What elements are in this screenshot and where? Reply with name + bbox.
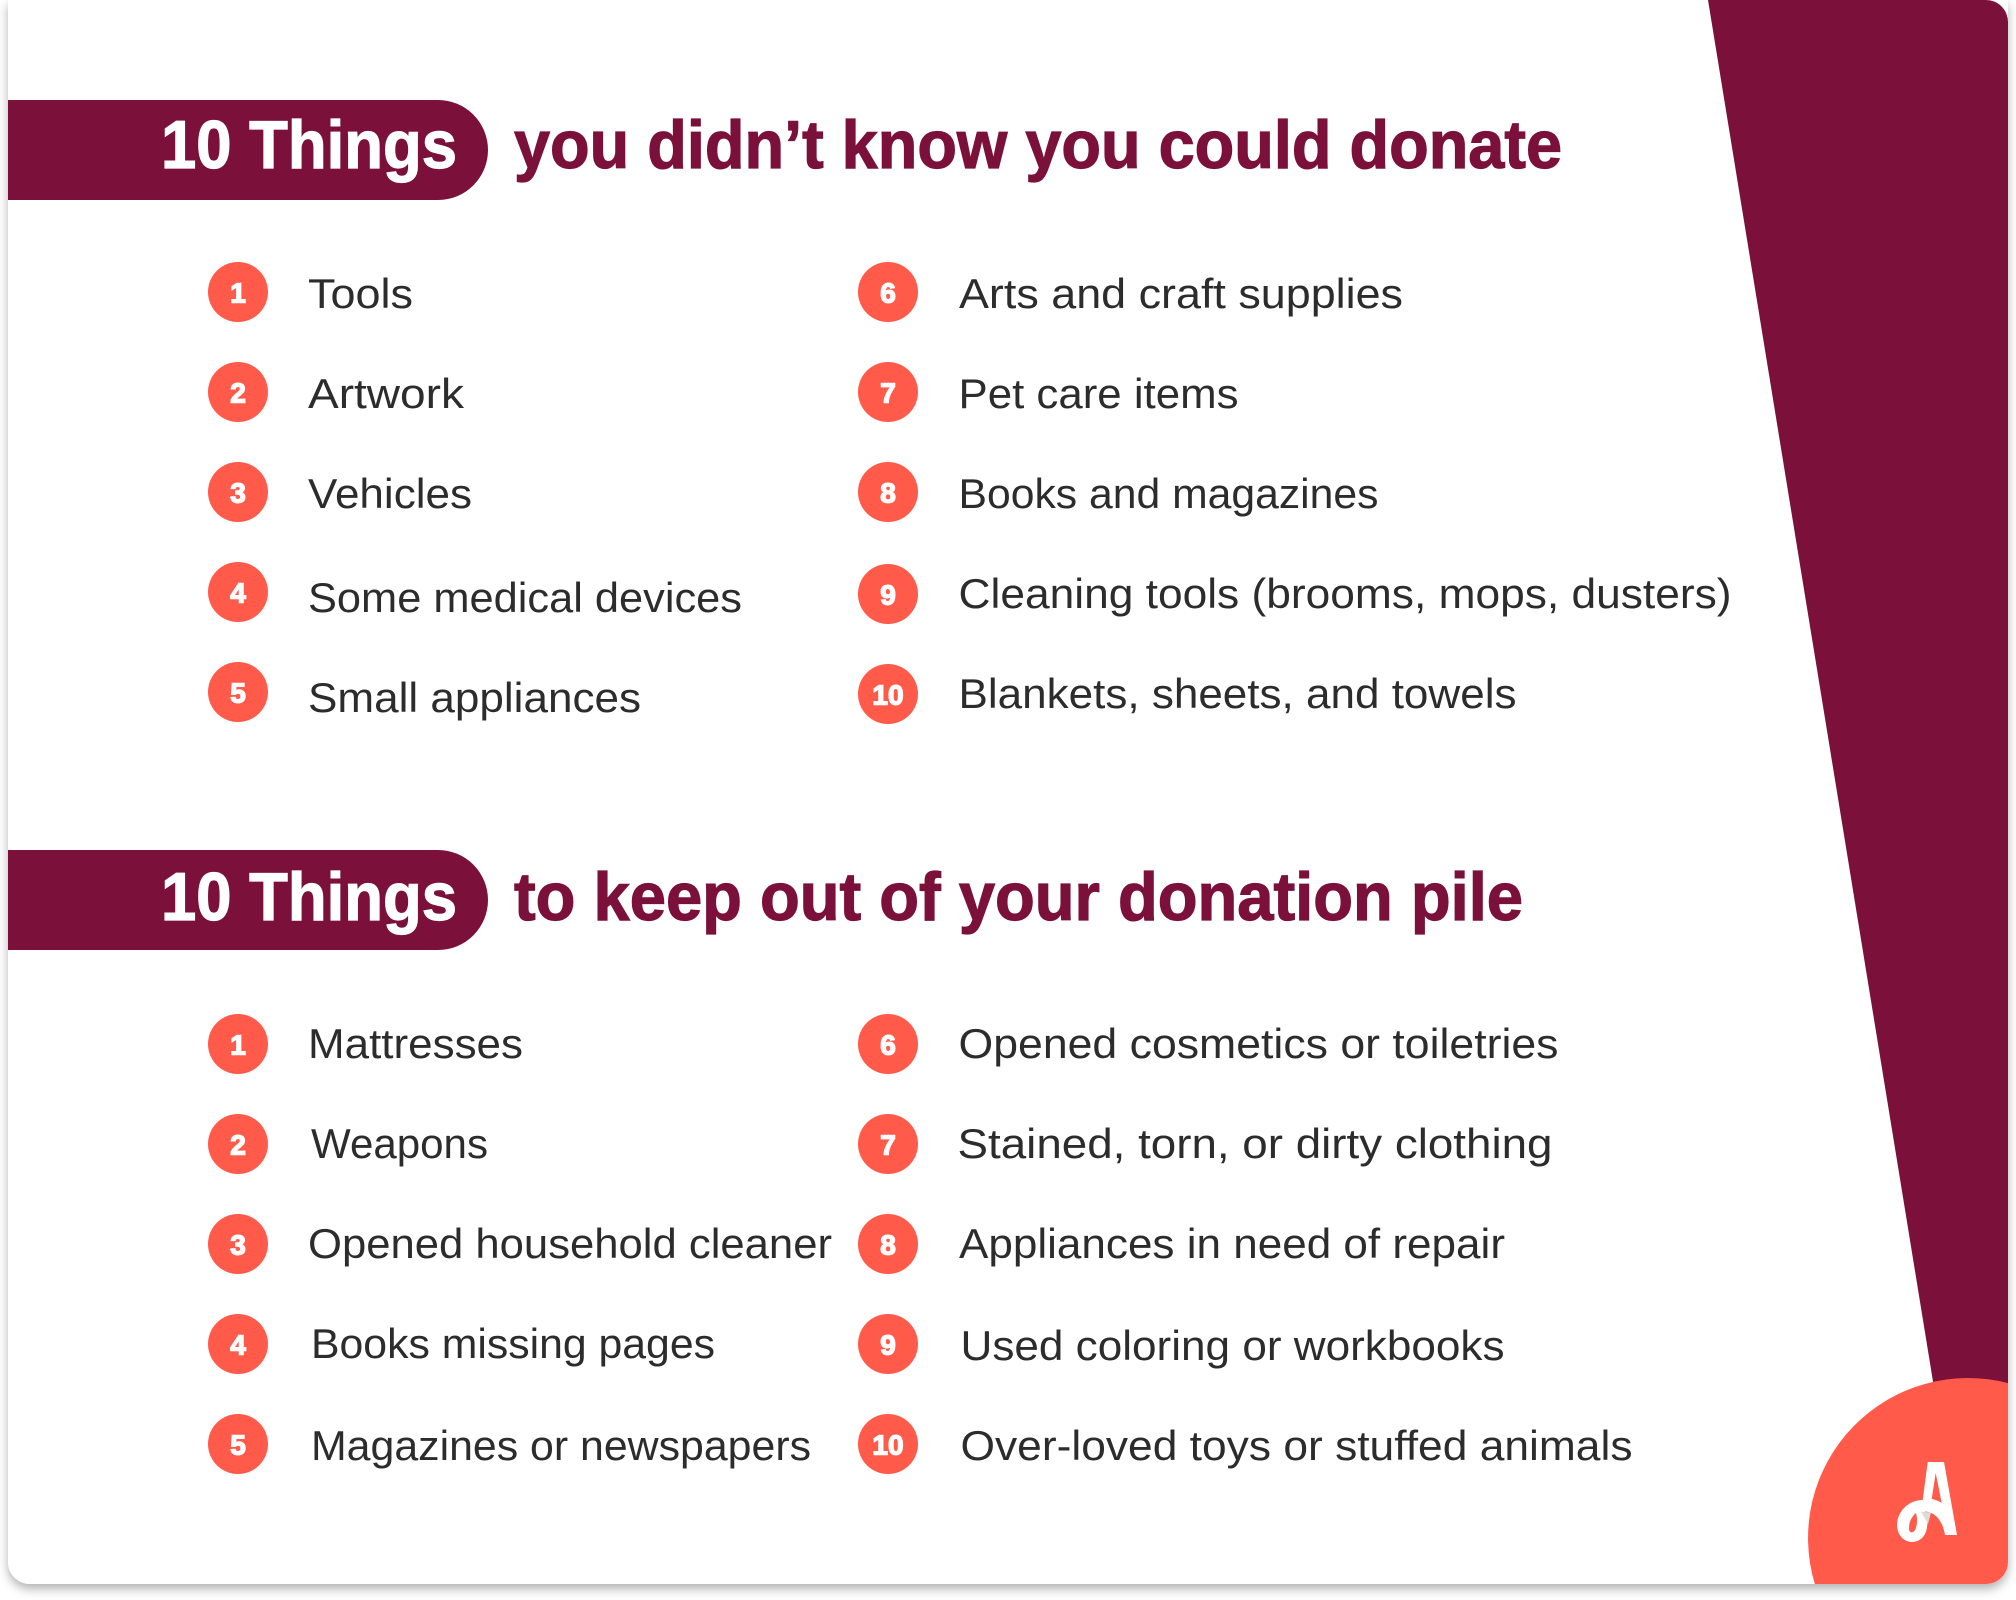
item 10: Blankets, sheets, and towels bbox=[958, 670, 1516, 717]
item 8: 8 bbox=[880, 1230, 896, 1260]
item 8 bbox=[858, 1214, 1505, 1274]
item 2 bbox=[208, 1114, 488, 1174]
heading text: to keep out of your donation pile bbox=[514, 859, 1523, 935]
heading pill bbox=[8, 100, 488, 200]
item 9: Cleaning tools (brooms, mops, dusters) bbox=[958, 570, 1732, 617]
item 1: 1 bbox=[230, 1030, 246, 1060]
item 9 bbox=[858, 564, 1732, 624]
item 4: 4 bbox=[230, 578, 246, 608]
item 6: Opened cosmetics or toiletries bbox=[958, 1020, 1558, 1067]
item 8: 8 bbox=[880, 478, 896, 508]
item 3: 3 bbox=[230, 1230, 246, 1260]
section 1 list, left column bbox=[208, 262, 742, 722]
item 10: 10 bbox=[872, 1430, 904, 1460]
heading text: you didn’t know you could donate bbox=[514, 107, 1562, 183]
item 4 bbox=[208, 1314, 715, 1374]
item 1 bbox=[208, 1014, 523, 1074]
item 5: 5 bbox=[230, 678, 246, 708]
item 4: Books missing pages bbox=[311, 1320, 715, 1367]
item 6: 6 bbox=[880, 1030, 896, 1060]
icon: logo letter bbox=[1897, 1462, 1957, 1542]
item 5 bbox=[208, 662, 641, 722]
item 10 bbox=[858, 664, 1516, 724]
item 3: 3 bbox=[230, 478, 246, 508]
item 3 bbox=[208, 1214, 832, 1274]
item 10: Over-loved toys or stuffed animals bbox=[960, 1422, 1632, 1469]
item 9 bbox=[858, 1314, 1504, 1374]
item 4: Some medical devices bbox=[308, 574, 742, 621]
item 7: Stained, torn, or dirty clothing bbox=[958, 1120, 1552, 1167]
item 1 bbox=[208, 262, 413, 322]
item 7 bbox=[858, 362, 1238, 422]
item 1: Mattresses bbox=[308, 1020, 523, 1067]
item 5 bbox=[208, 1414, 811, 1474]
item 9: 9 bbox=[880, 1330, 896, 1360]
heading label: 10 Things bbox=[161, 107, 457, 183]
item 2: 2 bbox=[230, 378, 246, 408]
section 1 list, right column bbox=[858, 262, 1732, 724]
item 2: 2 bbox=[230, 1130, 246, 1160]
item 8: Appliances in need of repair bbox=[959, 1220, 1505, 1267]
logo badge bbox=[1808, 1378, 2008, 1584]
item 7 bbox=[858, 1114, 1552, 1174]
item 6 bbox=[858, 1014, 1558, 1074]
item 3: Vehicles bbox=[308, 470, 472, 517]
item 10 bbox=[858, 1414, 1632, 1474]
item 5: Magazines or newspapers bbox=[311, 1422, 811, 1469]
right maroon wedge bbox=[1708, 0, 2008, 1400]
item 3: Opened household cleaner bbox=[308, 1220, 832, 1267]
item 6 bbox=[858, 262, 1403, 322]
item 2 bbox=[208, 362, 465, 422]
item 7: Pet care items bbox=[958, 370, 1238, 417]
heading pill bbox=[8, 850, 488, 950]
item 9: Used coloring or workbooks bbox=[960, 1322, 1504, 1369]
item 8 bbox=[858, 462, 1378, 522]
item 3 bbox=[208, 462, 472, 522]
item 1: 1 bbox=[230, 278, 246, 308]
item 5: 5 bbox=[230, 1430, 246, 1460]
item 7: 7 bbox=[880, 378, 896, 408]
item 5: Small appliances bbox=[308, 674, 641, 721]
item 6: 6 bbox=[880, 278, 896, 308]
item 2: Weapons bbox=[311, 1120, 488, 1167]
section 1 heading bbox=[8, 100, 1562, 200]
section 2 list, right column bbox=[858, 1014, 1632, 1474]
item 4 bbox=[208, 562, 742, 622]
section 2 list, left column bbox=[208, 1014, 832, 1474]
item 6: Arts and craft supplies bbox=[959, 270, 1403, 317]
item 7: 7 bbox=[880, 1130, 896, 1160]
item 10: 10 bbox=[872, 680, 904, 710]
heading label: 10 Things bbox=[161, 859, 457, 935]
item 1: Tools bbox=[308, 270, 413, 317]
item 9: 9 bbox=[880, 580, 896, 610]
section 2 heading bbox=[8, 850, 1523, 950]
item 4: 4 bbox=[230, 1330, 246, 1360]
item 8: Books and magazines bbox=[958, 470, 1378, 517]
item 2: Artwork bbox=[308, 370, 465, 417]
